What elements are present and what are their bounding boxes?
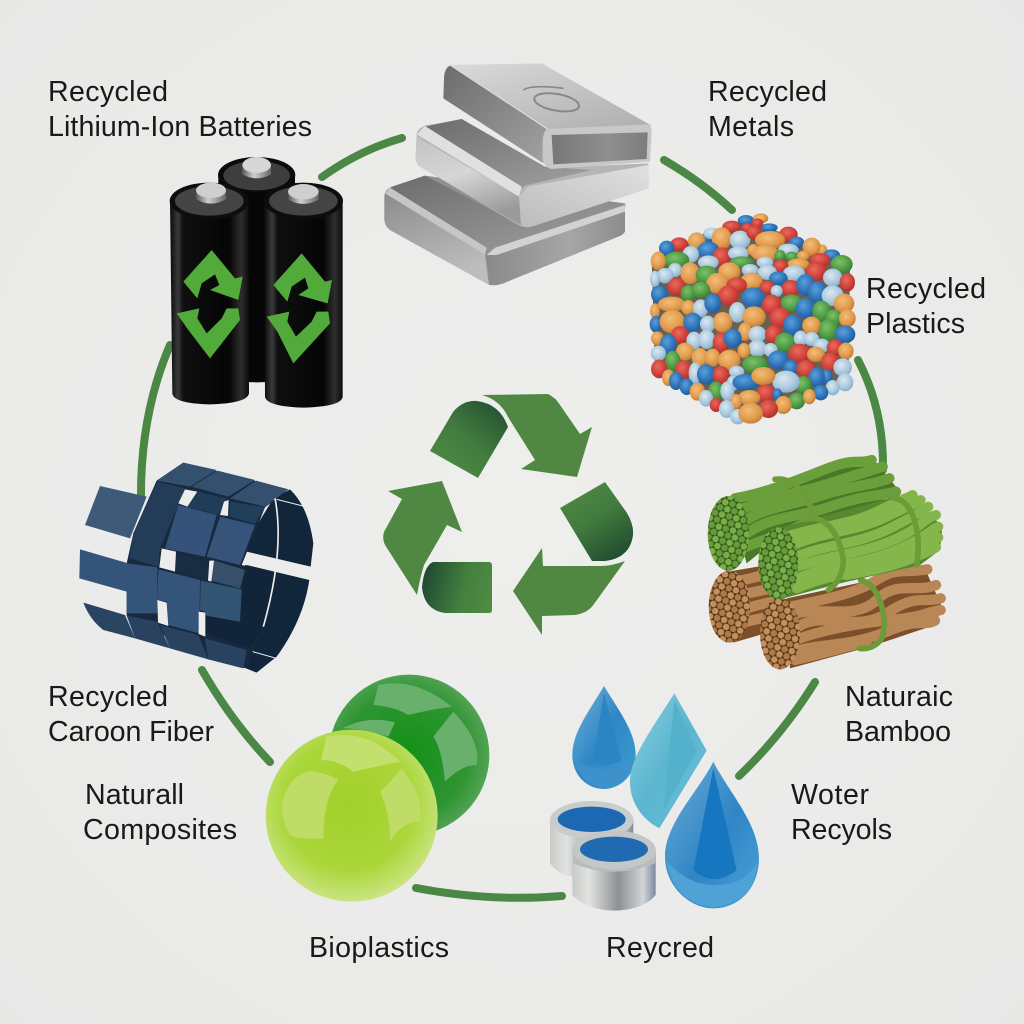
back battery: [218, 157, 295, 382]
label line: composites: Composites: [83, 814, 237, 846]
label: naturaic bamboo: Naturaic: [845, 681, 953, 713]
label line: recyols: Recyols: [791, 814, 892, 846]
drop: large: [665, 762, 759, 908]
green front bundle: [758, 493, 942, 599]
icon: cube of plastic pellets: [651, 214, 855, 423]
label: naturall composites: Naturall: [85, 779, 184, 811]
drop: pale cut: [630, 693, 707, 828]
central recycling symbol: [383, 394, 633, 635]
left battery: [170, 183, 249, 404]
sphere: lime green: [266, 730, 438, 902]
label: recycled plastics: Recycled: [866, 273, 986, 305]
can: front: [572, 831, 656, 911]
label line: caroon fiber: Caroon Fiber: [48, 716, 214, 748]
middle bar: [416, 119, 648, 227]
arrow: top: [482, 394, 592, 477]
label: reycred: Reycred: [606, 932, 714, 964]
green back bundle: [708, 457, 900, 571]
sphere: dark green: [329, 675, 489, 835]
label: recycled metals: Recycled: [708, 76, 827, 108]
label: bioplastics: Bioplastics: [309, 932, 449, 964]
bottom bar: [384, 176, 626, 285]
arrow: left: [383, 481, 462, 595]
right battery: [264, 183, 343, 408]
can: back: [550, 801, 633, 877]
brown back bundle: [709, 563, 777, 643]
woven strips: [79, 463, 308, 668]
block: bottom left: [422, 562, 492, 613]
drop: small: [572, 686, 636, 789]
gaps in the weave: [157, 489, 229, 637]
label: recycled lithium-ion batteries: Recycled: [48, 76, 168, 108]
arrow: bottom: [513, 548, 625, 635]
icon: woven carbon fiber cylinder: [79, 463, 313, 673]
top bar: [443, 63, 652, 169]
label line: metals: Metals: [708, 111, 794, 143]
block: top left: [430, 401, 508, 478]
inner cylinder wall: [242, 489, 313, 673]
block: right: [560, 482, 633, 561]
icon: water drops and cans: [550, 686, 759, 911]
label: woter recyols: Woter: [791, 779, 869, 811]
icon: bioplastic spheres: [266, 675, 489, 902]
label line: bamboo: Bamboo: [845, 716, 951, 748]
dark backing behind the weave: [127, 463, 288, 668]
icon: bamboo bundles: [708, 457, 943, 669]
label line: plastics: Plastics: [866, 308, 965, 340]
label: recycled carbon fiber: Recycled: [48, 681, 168, 713]
label line: lithium-ion batteries: Lithium-Ion Batteries: [48, 111, 312, 143]
cycle connector arcs: [141, 138, 883, 898]
icon: lithium-ion batteries: [170, 157, 343, 408]
brown front bundle: [760, 565, 943, 669]
icon: stacked metal bars: [384, 63, 652, 285]
